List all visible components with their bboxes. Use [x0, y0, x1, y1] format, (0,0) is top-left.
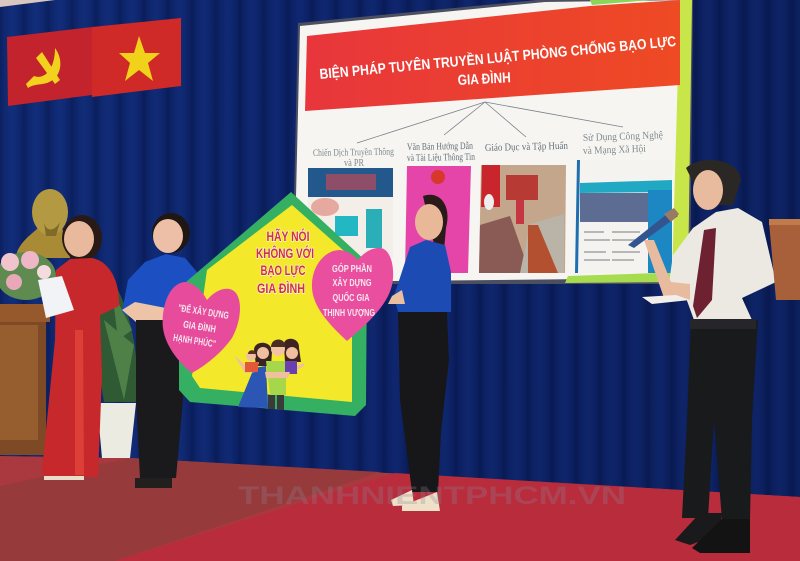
left heart: "ĐỂ XÂY DỰNG — [177, 301, 230, 322]
sign heading — [256, 229, 314, 296]
person: man in white shirt with microphone — [628, 160, 776, 553]
column label: campaign: và PR — [344, 158, 364, 169]
sign heading: HÃY NÓI — [266, 229, 310, 244]
awareness sign: house — [163, 192, 393, 416]
connector lines — [357, 102, 623, 143]
column label: campaign: Chiến Dịch Truyền Thông — [313, 147, 394, 159]
person: woman in blue shirt center — [388, 195, 451, 511]
left heart: GIA ĐÌNH — [182, 318, 217, 336]
bust statue — [17, 189, 70, 258]
slide image: social media — [575, 160, 672, 273]
watermark: THANHNIENTPHCM.VN — [238, 482, 626, 510]
person: woman in blue shirt left — [122, 213, 197, 488]
house outline — [179, 192, 367, 416]
sign heading: KHÔNG VỚI — [256, 246, 314, 261]
right heart: THỊNH VƯỢNG — [323, 307, 375, 319]
right heart: QUỐC GIA — [332, 290, 370, 304]
column label: technology: và Mạng Xã Hội — [583, 144, 646, 157]
right heart: GÓP PHẦN — [332, 262, 372, 275]
column label: documents — [407, 141, 475, 164]
flower arrangement — [0, 251, 56, 300]
sign heading: BẠO LỰC — [260, 263, 306, 278]
column label: education: Giáo Dục và Tập Huấn — [485, 141, 569, 154]
person: woman in red dress — [38, 215, 119, 480]
slide image: legal document — [405, 166, 471, 273]
right heart — [312, 248, 393, 341]
left heart: HẠNH PHÚC" — [172, 331, 217, 350]
potted plant — [97, 268, 137, 458]
left heart — [163, 282, 240, 373]
lectern right — [769, 219, 800, 300]
podium left — [0, 304, 50, 455]
column label: technology — [583, 130, 663, 157]
slide title banner: BIỆN PHÁP TUYÊN TRUYỀN LUẬT PHÒNG CHỐNG BẠO LỰC — [319, 32, 677, 83]
stage floor — [0, 456, 800, 561]
slide image: training — [479, 165, 566, 273]
slide image: campaign — [308, 168, 393, 258]
right heart: XÂY DỰNG — [332, 276, 372, 289]
sign heading: GIA ĐÌNH — [257, 281, 305, 296]
column label: documents: và Tài Liệu Thông Tin — [407, 152, 475, 164]
column label: documents: Văn Bản Hướng Dẫn — [407, 141, 473, 153]
slide title banner — [305, 0, 680, 111]
flag: hammer and sickle — [7, 27, 92, 106]
projection screen — [292, 0, 693, 284]
family illustration — [234, 339, 304, 410]
flag: gold star — [92, 18, 181, 97]
slide title banner: GIA ĐÌNH — [457, 69, 511, 89]
house interior — [192, 205, 352, 402]
column label: technology: Sử Dụng Công Nghệ — [583, 130, 663, 144]
column label: campaign — [313, 147, 394, 169]
